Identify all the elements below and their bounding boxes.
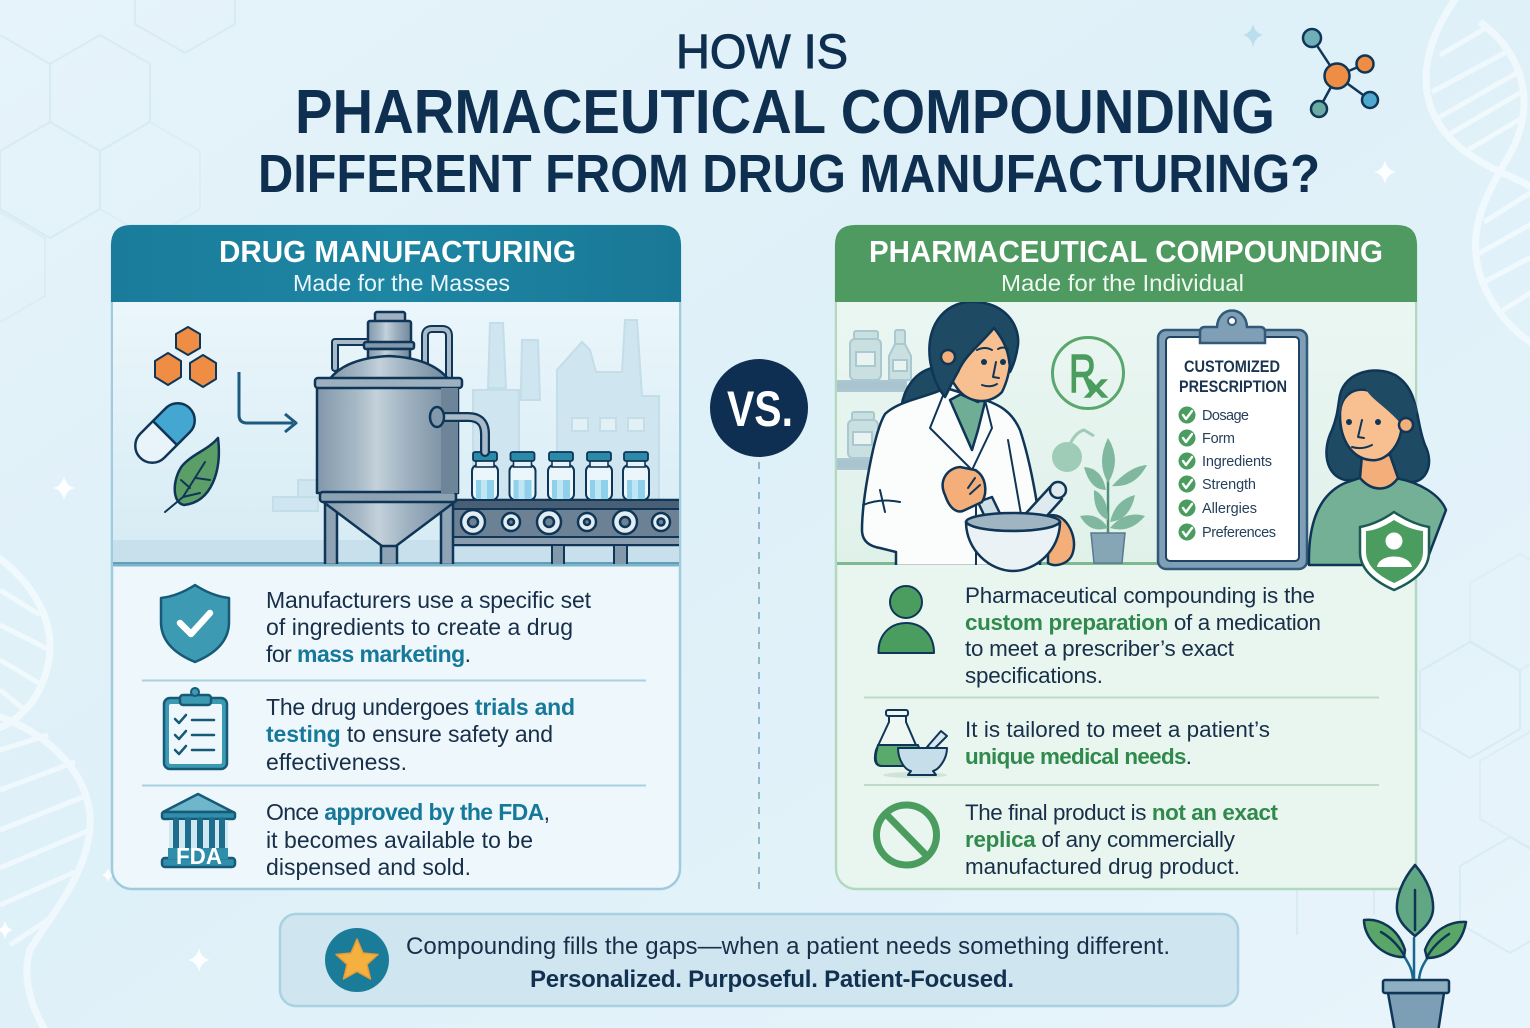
checklist: Ingredients (1202, 454, 1272, 470)
callout: footer: Compounding fills the gaps—when a patient needs something different. (406, 933, 1170, 960)
illustration: factory (113, 302, 682, 566)
text block 2: The drug undergoes trials and (266, 694, 575, 720)
DNA left strands (0, 555, 90, 1028)
icon: molecule (1303, 29, 1378, 117)
vials (472, 452, 649, 500)
illustration: pharmacy (836, 302, 1415, 566)
text block 4: to meet a prescriber’s exact (965, 636, 1235, 661)
clipboard (1158, 310, 1307, 569)
potted plant (1080, 438, 1147, 563)
icon: potted plant (1364, 865, 1466, 1028)
panel header: Made for the Individual (1001, 270, 1244, 296)
text block 3: Once approved by the FDA, (266, 799, 550, 825)
text block 5: It is tailored to meet a patient’s (965, 717, 1270, 742)
title: DIFFERENT FROM DRUG MANUFACTURING? (258, 144, 1320, 204)
dividers (864, 698, 1379, 785)
text block 6: The final product is not an exact (965, 800, 1279, 825)
text block 1: of ingredients to create a drug (266, 614, 573, 640)
background plant (1052, 430, 1094, 472)
callout: footer (280, 914, 1238, 1006)
icon: shield (161, 585, 229, 662)
icon: flask with mortar (875, 710, 947, 778)
text block 1: Manufacturers use a specific set (266, 587, 592, 613)
text block 6: replica of any commercially (965, 827, 1236, 852)
VS badge (710, 359, 808, 457)
text block 6 (965, 800, 1279, 879)
divider band (113, 564, 679, 566)
checklist: Form (1202, 431, 1235, 447)
text block 3: it becomes available to be (266, 827, 533, 853)
icon: checklist clipboard (164, 688, 227, 769)
text block 2: effectiveness. (266, 749, 407, 775)
text block 1: for mass marketing. (266, 641, 471, 667)
icon: Rx: R (1069, 344, 1096, 404)
icon: FDA building (162, 794, 235, 869)
panel header (111, 225, 681, 302)
icon: prohibited (876, 805, 936, 865)
text block 3: dispensed and sold. (266, 854, 471, 880)
text block 3 (266, 799, 550, 880)
clipboard: PRESCRIPTION (1179, 378, 1287, 396)
shelves with jars (836, 330, 911, 469)
text block 4 (965, 583, 1321, 688)
icon: person (878, 586, 934, 653)
dividers (142, 680, 646, 786)
patient (1309, 371, 1446, 565)
panel header: Made for the Masses (293, 270, 510, 296)
icon: Rx: x (1085, 368, 1107, 404)
icon: Rx (1052, 338, 1124, 408)
icon: leaf (165, 438, 219, 512)
text block 6: manufactured drug product. (965, 854, 1240, 879)
text block 4: custom preparation of a medication (965, 610, 1321, 635)
pharmacist (862, 302, 1040, 566)
mortar and pestle with hands (943, 467, 1074, 571)
title (258, 26, 1320, 204)
text block 2 (266, 694, 575, 775)
icon: FDA building: FDA (176, 843, 222, 869)
text block 5: unique medical needs. (965, 744, 1192, 769)
checklist: Allergies (1202, 501, 1257, 517)
title: PHARMACEUTICAL COMPOUNDING (295, 78, 1275, 147)
text block 4: specifications. (965, 663, 1103, 688)
VS badge: VS. (727, 381, 793, 437)
text block 4: Pharmaceutical compounding is the (965, 583, 1315, 608)
panel header (835, 225, 1417, 302)
icon: star badge (325, 928, 389, 992)
mixing tank (315, 312, 485, 565)
dashed connector (758, 462, 760, 890)
icon: hexagon cluster (155, 327, 216, 387)
DNA right strands (1426, 0, 1530, 345)
checklist: Preferences (1202, 525, 1276, 541)
panel: pharmaceutical compounding (835, 225, 1446, 889)
checklist: Strength (1202, 477, 1256, 493)
conveyor (452, 500, 682, 566)
icon: user shield (1360, 512, 1429, 590)
arrow (239, 372, 296, 432)
title: HOW IS (676, 26, 848, 79)
panel header: PHARMACEUTICAL COMPOUNDING (869, 234, 1383, 269)
panel: drug manufacturing (111, 225, 682, 889)
callout: footer: Personalized. Purposeful. Patient-Focused. (530, 966, 1014, 993)
panel header: DRUG MANUFACTURING (219, 234, 576, 269)
icon: capsule (128, 396, 202, 470)
checklist: Dosage (1202, 408, 1249, 424)
text block 1 (266, 587, 592, 667)
checklist (1178, 406, 1276, 541)
clipboard: CUSTOMIZED (1184, 358, 1280, 376)
text block 5 (965, 717, 1270, 769)
text block 2: testing to ensure safety and (266, 721, 553, 747)
